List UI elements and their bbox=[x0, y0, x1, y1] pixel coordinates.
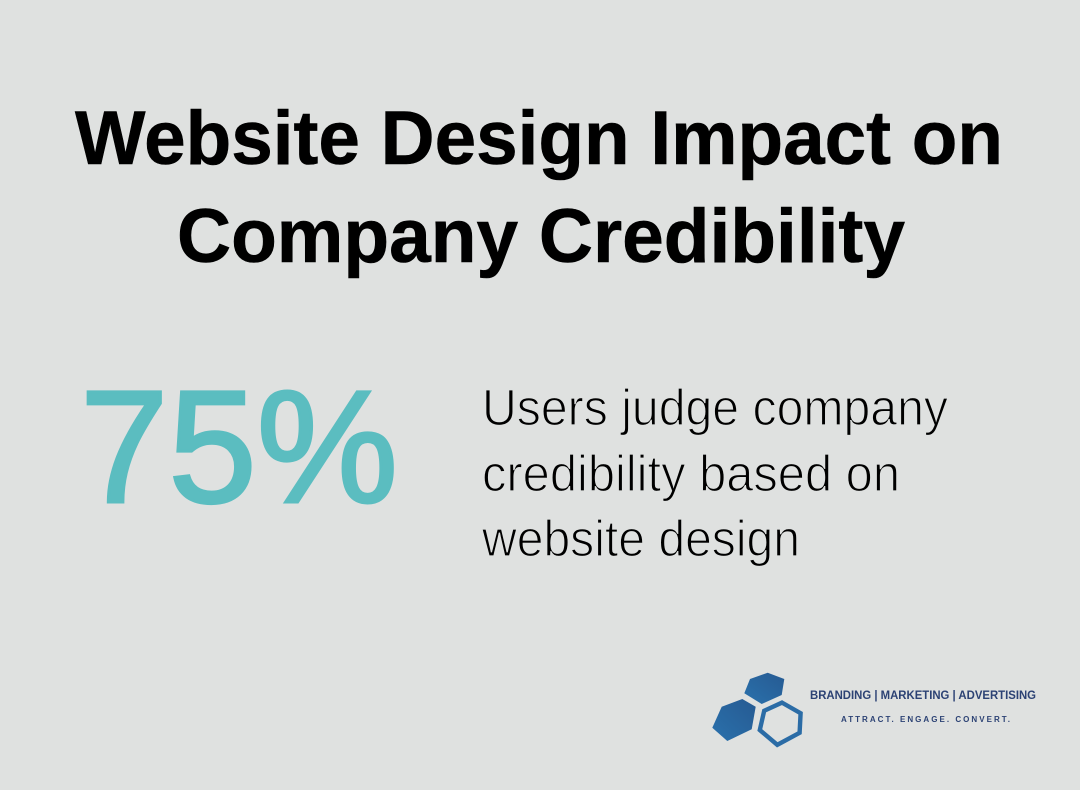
title: Website Design Impact on bbox=[75, 96, 1003, 181]
title bbox=[75, 96, 1003, 279]
statistic: 75%: 75% bbox=[80, 357, 398, 536]
description text bbox=[481, 379, 948, 567]
logo tagline: attract engage convert: ATTRACT. ENGAGE. CONVERT. bbox=[841, 715, 1010, 724]
description text: Users judge company bbox=[482, 379, 948, 436]
icon: left filled hexagon bbox=[712, 699, 756, 741]
icon: outlined hexagon bbox=[760, 703, 801, 745]
logo tagline: services: BRANDING | MARKETING | ADVERTISING bbox=[810, 690, 1036, 702]
description text: credibility based on bbox=[482, 445, 900, 502]
title: Company Credibility bbox=[177, 194, 905, 279]
description text: website design bbox=[481, 510, 800, 567]
logo bbox=[712, 673, 1036, 745]
icon: top filled hexagon bbox=[744, 673, 784, 704]
